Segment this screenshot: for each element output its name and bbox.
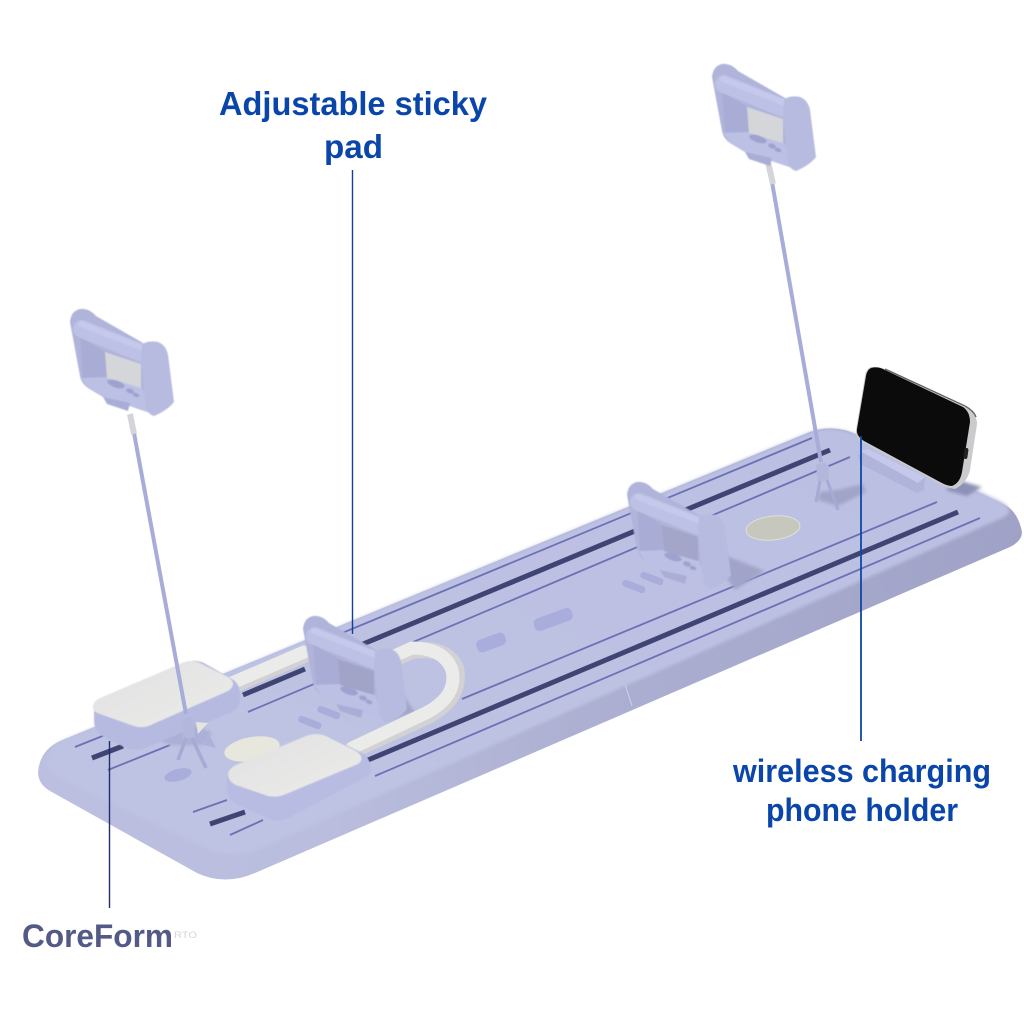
label: wireless charging phone holder: wireless charging: [732, 753, 991, 789]
handle: on right arm: [712, 64, 816, 171]
board side face: [38, 428, 1022, 880]
label: Adjustable sticky pad: pad: [324, 128, 383, 165]
sticky pad right: [227, 734, 371, 820]
leader line: brand: [108, 741, 110, 908]
phone holder rail: [858, 449, 925, 493]
board top surface: [46, 429, 1009, 854]
handle: rear on board: [627, 482, 731, 589]
handle: front on board: [303, 616, 407, 723]
charging cable: [232, 648, 457, 751]
brand: CoreForm: CoreForm: [22, 918, 173, 954]
lower rail grooves: [193, 502, 980, 835]
brand: CoreForm: RTO: [174, 930, 197, 940]
phone: [856, 367, 977, 489]
label: Adjustable sticky pad: Adjustable sticky: [219, 85, 488, 122]
handle: on left arm: [70, 309, 174, 416]
wireless charging disc: [745, 513, 801, 543]
sticky pad left: [93, 661, 240, 750]
shadows on board: [145, 481, 982, 745]
leader line: sticky pad: [352, 170, 354, 634]
label: wireless charging phone holder: [732, 753, 991, 828]
leader line: phone holder: [860, 436, 862, 741]
mounting slots: [163, 571, 664, 784]
label: Adjustable sticky pad: [219, 85, 488, 165]
seam: [625, 684, 632, 706]
arm right with base: [768, 162, 838, 510]
label: wireless charging phone holder: phone holder: [766, 792, 958, 828]
product: CoreForm board: [38, 64, 1022, 879]
adhesive disc near pads: [222, 732, 282, 766]
arm left with base: [130, 414, 216, 768]
upper rail grooves: [75, 438, 850, 770]
